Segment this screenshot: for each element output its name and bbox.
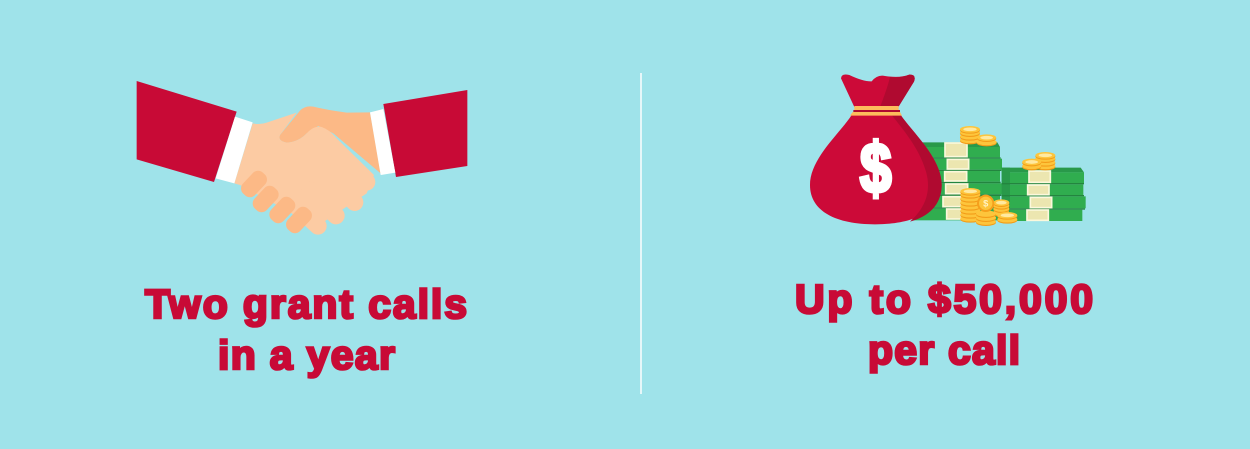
coins on front stack — [1022, 152, 1055, 170]
right cuff — [370, 109, 395, 175]
heading: up to $50,000: Up to $50,000 — [795, 276, 1093, 322]
coins in front: $ — [983, 199, 989, 209]
right sleeve — [383, 90, 467, 177]
icon: dollar sign: $ — [860, 128, 891, 208]
bag body — [810, 115, 942, 224]
back cash stack — [913, 142, 1002, 220]
coins on back stack — [960, 126, 997, 146]
icon: money bag and cash — [810, 74, 1086, 226]
left sleeve — [137, 81, 237, 182]
heading: up to $50,000 — [795, 276, 1093, 373]
left cuff — [216, 117, 253, 183]
heading: two grant calls: in a year — [218, 332, 395, 378]
bag top — [841, 74, 915, 107]
front cash stack — [1002, 168, 1086, 221]
bag neck bands — [850, 106, 902, 116]
heading: two grant calls — [145, 281, 467, 378]
heading: up to $50,000: per call — [868, 327, 1020, 373]
icon: handshake — [137, 81, 467, 236]
coins in front — [960, 188, 1017, 226]
fingers — [238, 168, 315, 236]
heading: two grant calls: Two grant calls — [145, 281, 467, 327]
